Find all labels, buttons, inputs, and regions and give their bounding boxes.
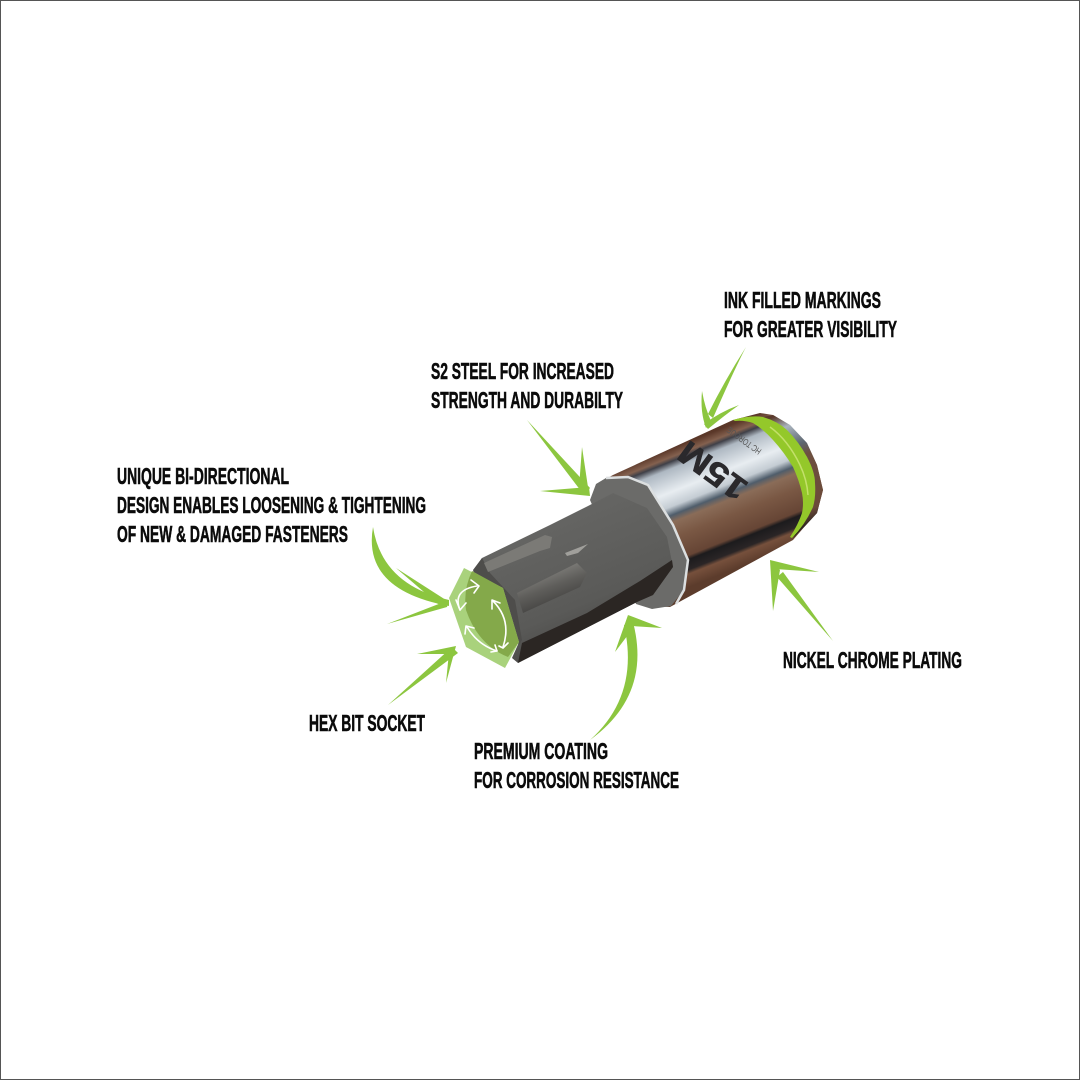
small engraved marking: HC TORQUE (725, 425, 763, 456)
label: s2 steel (431, 358, 623, 413)
hex overlay outer (449, 568, 519, 668)
collar bright rim (606, 477, 688, 604)
label: unique bi-directional design (117, 463, 426, 547)
green ring band (733, 416, 815, 538)
torx notch (565, 544, 588, 556)
ring highlight (770, 427, 808, 495)
socket end cap (763, 415, 823, 538)
label: ink filled markings: FOR GREATER VISIBILITY (724, 316, 897, 342)
socket collar flange (590, 477, 688, 609)
arrow: premium coating (590, 615, 662, 740)
bi-directional arrows (456, 580, 508, 652)
size marking 15M: 15M (671, 434, 754, 508)
label: ink filled markings: INK FILLED MARKINGS (724, 287, 881, 313)
torx flute top (484, 535, 552, 572)
bit shank (473, 493, 673, 663)
label: unique bi-directional design: DESIGN ENABLES LOOSENING & TIGHTENING (117, 492, 426, 518)
torx nose facet (473, 558, 522, 645)
label: ink filled markings (724, 287, 897, 342)
arrow: ink filled markings (702, 347, 746, 429)
socket bit product illustration (449, 413, 823, 668)
arrow: unique bi-directional (372, 527, 449, 624)
shank lower dark face (518, 560, 673, 663)
label: s2 steel: S2 STEEL FOR INCREASED (431, 358, 614, 384)
label: premium coating: FOR CORROSION RESISTANCE (474, 767, 679, 793)
label: premium coating: PREMIUM COATING (474, 738, 608, 764)
torx flute middle (517, 563, 587, 613)
arrow: nickel chrome plating (770, 560, 833, 641)
arrow: s2 steel (527, 420, 590, 496)
label: premium coating (474, 738, 679, 793)
label: hex bit socket: HEX BIT SOCKET (309, 710, 425, 736)
label: unique bi-directional design: OF NEW & DAMAGED FASTENERS (117, 521, 348, 547)
label: unique bi-directional design: UNIQUE BI-DIRECTIONAL (117, 463, 289, 489)
hex overlay dark socket face (465, 571, 519, 657)
socket body: nickel chrome cylinder (600, 413, 823, 607)
label: s2 steel: STRENGTH AND DURABILTY (431, 387, 623, 413)
arrow: hex bit socket (388, 646, 458, 705)
label: nickel chrome plating: NICKEL CHROME PLATING (783, 647, 962, 673)
